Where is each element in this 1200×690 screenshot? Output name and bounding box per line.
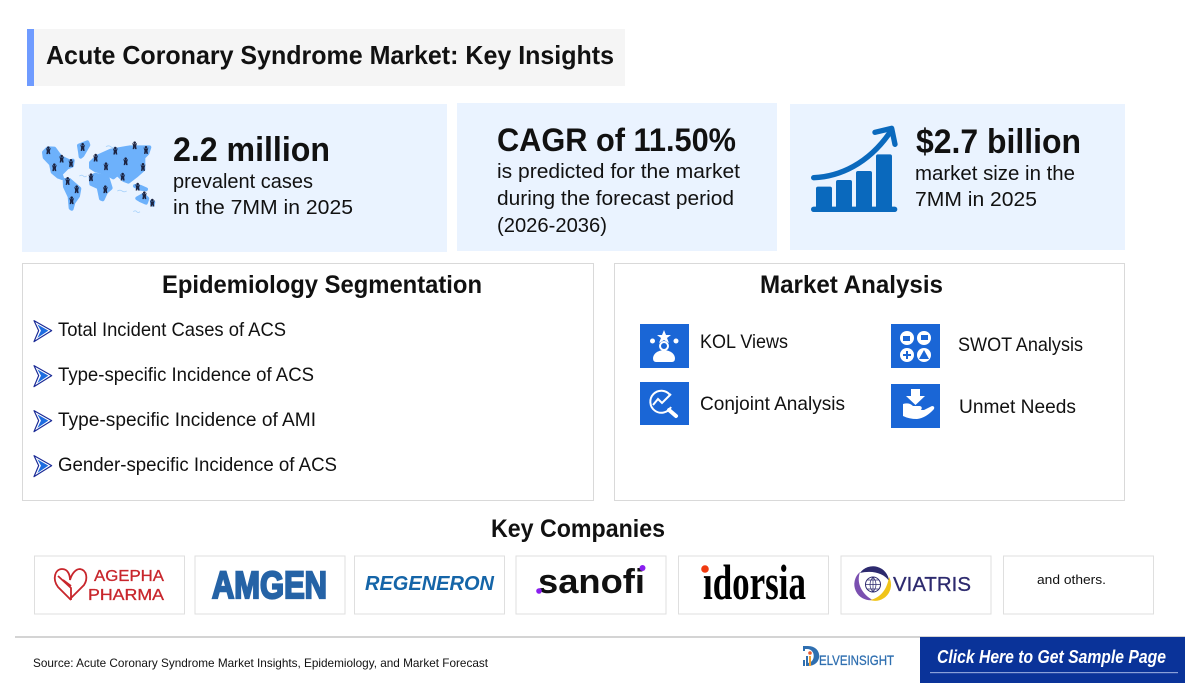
label: conjoint analysis: Conjoint Analysis — [700, 393, 845, 415]
logo: Viatris — [841, 556, 991, 614]
text: in the 7MM in 2025: in the 7MM in 2025 — [173, 196, 353, 219]
panel: prevalent cases — [22, 104, 447, 252]
icon: conjoint analysis — [640, 382, 689, 425]
icon: unmet needs — [891, 384, 940, 428]
text: forecast description: (2026-2036) — [497, 214, 607, 237]
button: get sample page: Click Here to Get Sample Page — [937, 647, 1166, 667]
logo: Agepha Pharma — [34, 556, 184, 614]
panel: market size — [790, 104, 1125, 250]
list item: gender-specific incidence: Gender-specific Incidence of ACS — [58, 454, 337, 476]
text: forecast description — [497, 160, 740, 237]
icon: growth bar chart — [811, 128, 897, 212]
list item: type-specific incidence of AMI: Type-specific Incidence of AMI — [58, 409, 316, 431]
logo box: and others: and others. — [1037, 572, 1106, 587]
label: SWOT analysis: SWOT Analysis — [958, 334, 1083, 356]
logo: Amgen — [195, 556, 345, 614]
icon: KOL views — [640, 324, 689, 368]
panel: epidemiology segmentation — [22, 264, 594, 500]
heading: epidemiology segmentation: Epidemiology Segmentation — [162, 271, 482, 299]
list item: total incident cases: Total Incident Cases of ACS — [58, 319, 286, 341]
heading: key companies: Key Companies — [491, 515, 665, 543]
panel: market analysis — [614, 264, 1124, 500]
logo: Idorsia: ıdorsia — [703, 554, 806, 610]
logo: Agepha Pharma: AGEPHA — [94, 568, 165, 585]
label: KOL views: KOL Views — [700, 331, 788, 353]
logo: Regeneron — [354, 556, 504, 614]
text: market size in the: market size in the — [915, 162, 1075, 185]
heading: market analysis: Market Analysis — [760, 271, 943, 299]
logo: Agepha Pharma: PHARMA — [88, 587, 165, 604]
logo: Sanofi: sanofi — [538, 563, 645, 601]
title banner — [27, 29, 625, 86]
panel: CAGR — [457, 103, 777, 251]
logo: DelveInsight — [803, 646, 894, 668]
text: forecast description: is predicted for the market — [497, 160, 740, 183]
logo: Sanofi — [516, 556, 666, 614]
text: forecast description: during the forecast period — [497, 187, 734, 210]
label: unmet needs: Unmet Needs — [959, 396, 1076, 418]
icon: world map — [44, 141, 155, 212]
text: prevalent cases: prevalent cases — [173, 170, 313, 193]
logo: Regeneron: REGENERON — [365, 572, 495, 595]
text: 7MM in 2025: 7MM in 2025 — [915, 188, 1037, 211]
button: get sample page — [920, 637, 1185, 683]
logo: Idorsia — [678, 554, 828, 614]
logo: DelveInsight: ELVEINSIGHT — [819, 652, 894, 668]
list item: type-specific incidence of ACS: Type-specific Incidence of ACS — [58, 364, 314, 386]
stat: 2.2 million: 2.2 million — [173, 131, 330, 169]
stat: $2.7 billion: $2.7 billion — [916, 123, 1081, 161]
source note: Source: Acute Coronary Syndrome Market Insights, Epidemiology, and Market Forecast — [33, 656, 489, 670]
icon: SWOT — [891, 324, 940, 368]
logo: Viatris: VIATRIS — [893, 574, 971, 596]
stat: CAGR of 11.50%: CAGR of 11.50% — [497, 122, 736, 158]
title banner: Acute Coronary Syndrome Market: Key Insights — [46, 40, 614, 70]
logo: Amgen: AMGEN — [212, 565, 327, 607]
logo box: and others — [1004, 556, 1154, 614]
